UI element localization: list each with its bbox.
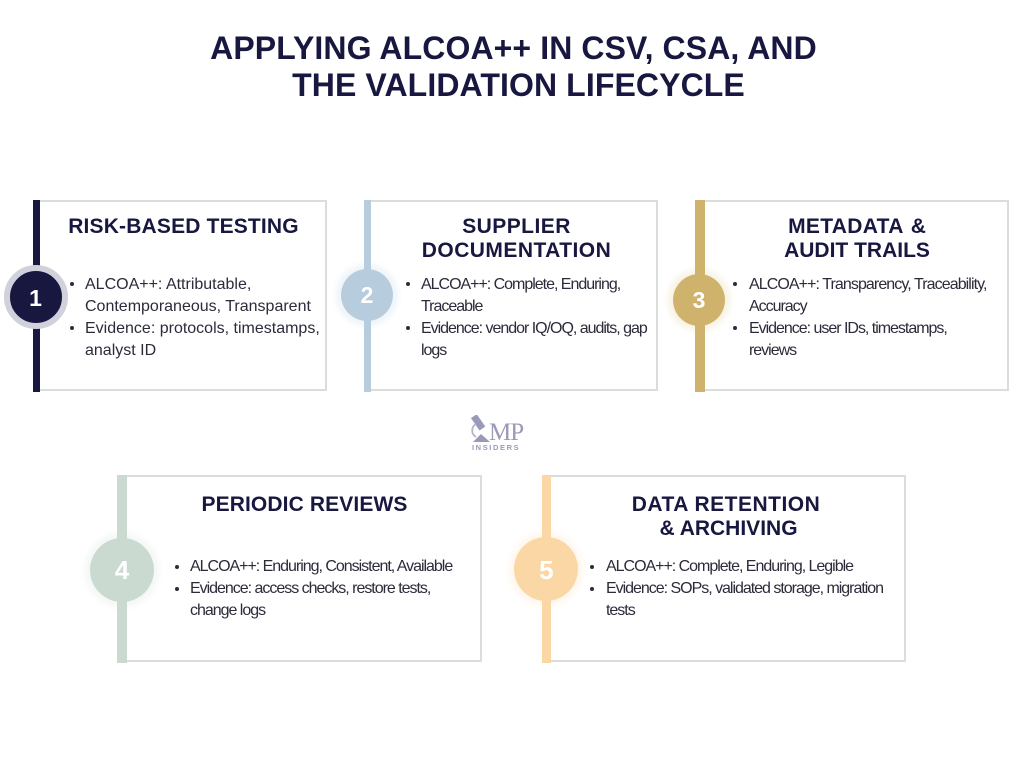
title (210, 30, 817, 103)
accent bar 5 (542, 475, 551, 663)
heading 2: DOCUMENTATION (422, 239, 611, 262)
badge halo 2 (341, 269, 393, 321)
bullets 3 (749, 276, 987, 359)
logo: GMP Insiders (471, 415, 524, 452)
bullets 2: ALCOA++: Complete, Enduring, (421, 276, 620, 293)
bullets 2: Traceable (421, 298, 482, 315)
title: THE VALIDATION LIFECYCLE (292, 67, 745, 103)
bullet dot 3b (733, 326, 737, 330)
heading 5 (632, 493, 820, 540)
bullets 3: ALCOA++: Transparency, Traceability, (749, 276, 987, 293)
heading 2 (422, 215, 611, 262)
panel: periodic reviews (87, 475, 482, 663)
bullets 1: Evidence: protocols, timestamps, (85, 320, 320, 337)
panel: metadata and audit trails (666, 200, 1009, 392)
panel: risk-based testing (4, 200, 327, 392)
bullet dot 3a (733, 282, 737, 286)
badge halo 5 (514, 537, 578, 601)
bullets 3: reviews (749, 342, 796, 359)
logo wordmark: MP (489, 419, 523, 446)
bullet dot 2a (406, 282, 410, 286)
bullets 3: Evidence: user IDs, timestamps, (749, 320, 947, 337)
number badge 4 (90, 538, 154, 602)
number badge 3 (673, 274, 725, 326)
bullet dot 4b (175, 587, 179, 591)
number badge 5 (514, 537, 578, 601)
bullet dot 5b (590, 587, 594, 591)
bullets 4: change logs (190, 602, 265, 619)
icon: microscope (471, 415, 490, 442)
bullets 5: tests (606, 602, 635, 619)
bullet dot 1b (70, 326, 74, 330)
heading 2: SUPPLIER (462, 215, 571, 238)
bullets 5 (606, 558, 883, 619)
bullet dot 4a (175, 565, 179, 569)
accent bar 1 (33, 200, 40, 392)
bullets 3: Accuracy (749, 298, 807, 315)
bullets 1: Contemporaneous, Transparent (85, 298, 311, 315)
badge halo 3 (673, 274, 725, 326)
heading 1: RISK-BASED TESTING (68, 215, 299, 238)
bullets 1: ALCOA++: Attributable, (85, 276, 251, 293)
card frame 5 (542, 475, 906, 662)
heading 3: AUDIT TRAILS (784, 239, 930, 262)
bullets 5: ALCOA++: Complete, Enduring, Legible (606, 558, 853, 575)
bullet dot 5a (590, 565, 594, 569)
heading 5: DATA RETENTION (632, 493, 820, 516)
bullet dot 1a (70, 282, 74, 286)
heading 3 (784, 215, 930, 262)
heading 5: & ARCHIVING (659, 517, 798, 540)
number badge 3: 3 (693, 287, 705, 313)
bullets 1: analyst ID (85, 342, 156, 359)
card frame 4 (117, 475, 482, 662)
card frame 3 (695, 200, 1009, 391)
number badge 5: 5 (539, 555, 554, 585)
bullets 4: ALCOA++: Enduring, Consistent, Available (190, 558, 452, 575)
card frame 1 (33, 200, 327, 391)
bullets 2: logs (421, 342, 446, 359)
number badge 1 (4, 265, 68, 329)
badge halo 4 (90, 538, 154, 602)
title: APPLYING ALCOA++ IN CSV, CSA, AND (210, 30, 817, 66)
accent bar 3 (695, 200, 705, 392)
panel: data retention and archiving (509, 475, 906, 663)
number badge 1: 1 (29, 285, 42, 311)
logo subtext: INSIDERS (472, 443, 520, 452)
accent bar 4 (117, 475, 127, 663)
heading 4: PERIODIC REVIEWS (201, 493, 408, 516)
bullets 5: Evidence: SOPs, validated storage, migration (606, 580, 883, 597)
bullets 4 (190, 558, 453, 619)
bullets 2: Evidence: vendor IQ/OQ, audits, gap (421, 320, 647, 337)
bullets 1 (85, 276, 320, 359)
bullet dot 2b (406, 326, 410, 330)
panel: supplier documentation (336, 200, 658, 392)
bullets 2 (421, 276, 648, 359)
number badge 2 (341, 269, 393, 321)
number badge 4: 4 (115, 554, 129, 584)
card frame 2 (364, 200, 658, 391)
bullets 4: Evidence: access checks, restore tests, (190, 580, 430, 597)
number badge 2: 2 (361, 282, 373, 308)
heading 3: METADATA & (788, 215, 926, 238)
accent bar 2 (364, 200, 371, 392)
